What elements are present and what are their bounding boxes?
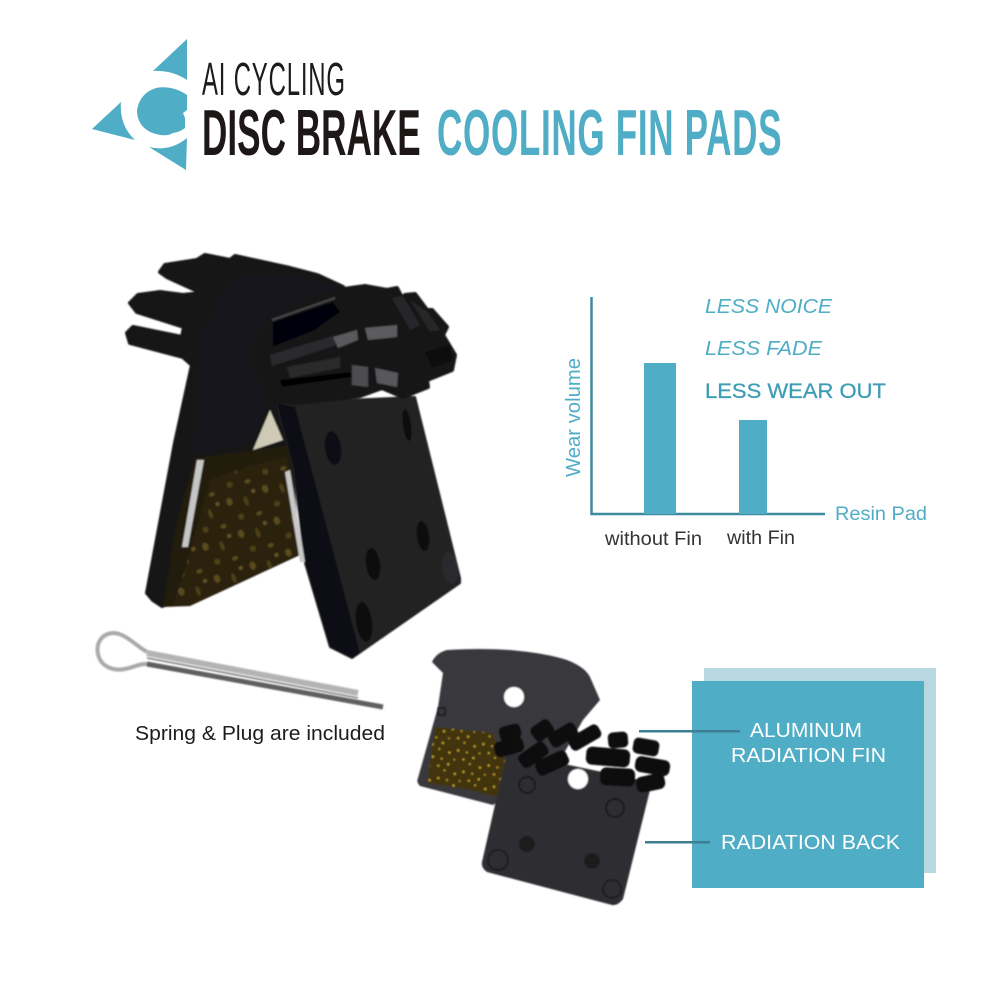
x label: with fin: with Fin — [726, 527, 795, 549]
glimpse of backing plate — [253, 410, 283, 450]
leader line: fin — [639, 730, 740, 732]
front pad — [482, 752, 650, 905]
x label: without fin: without Fin — [604, 528, 702, 550]
panel shadow block — [704, 668, 936, 873]
label: aluminum radiation fin: RADIATION FIN — [731, 744, 886, 767]
caption: spring and plug: Spring & Plug are included — [135, 723, 385, 745]
brand line: AI CYCLING — [202, 54, 345, 105]
friction material — [427, 727, 505, 797]
heading: cooling fin pads: COOLING FIN PADS — [437, 98, 782, 170]
y axis label: Wear volume — [563, 358, 585, 477]
bar: with fin — [739, 420, 767, 514]
x axis label: Resin Pad — [835, 503, 927, 525]
benefit: less noice: LESS NOICE — [705, 296, 833, 318]
small brake pad pair photo — [417, 649, 671, 905]
leader line: back — [645, 841, 710, 844]
label: radiation back: RADIATION BACK — [721, 831, 900, 854]
heading: disc brake: DISC BRAKE — [202, 98, 421, 170]
front pad plate — [277, 397, 460, 658]
panel main block — [692, 681, 924, 888]
front pad cooling fins — [253, 286, 455, 403]
rear pad — [127, 255, 350, 607]
label: aluminum radiation fin: ALUMINUM — [750, 719, 862, 742]
bar: without fin — [644, 363, 676, 514]
friction material — [173, 457, 297, 605]
title — [202, 54, 782, 170]
back pad — [417, 649, 600, 805]
chart axes — [592, 297, 825, 514]
wear volume bar chart — [563, 296, 927, 550]
callout panel — [639, 668, 936, 888]
logo: triangle mark — [92, 39, 187, 170]
benefit: less wear out: LESS WEAR OUT — [705, 380, 886, 403]
cooling fins — [492, 717, 671, 794]
large brake pad pair photo — [127, 255, 460, 658]
cotter pin — [98, 633, 383, 707]
benefit: less fade: LESS FADE — [705, 338, 823, 360]
label: aluminum radiation fin — [731, 719, 886, 767]
